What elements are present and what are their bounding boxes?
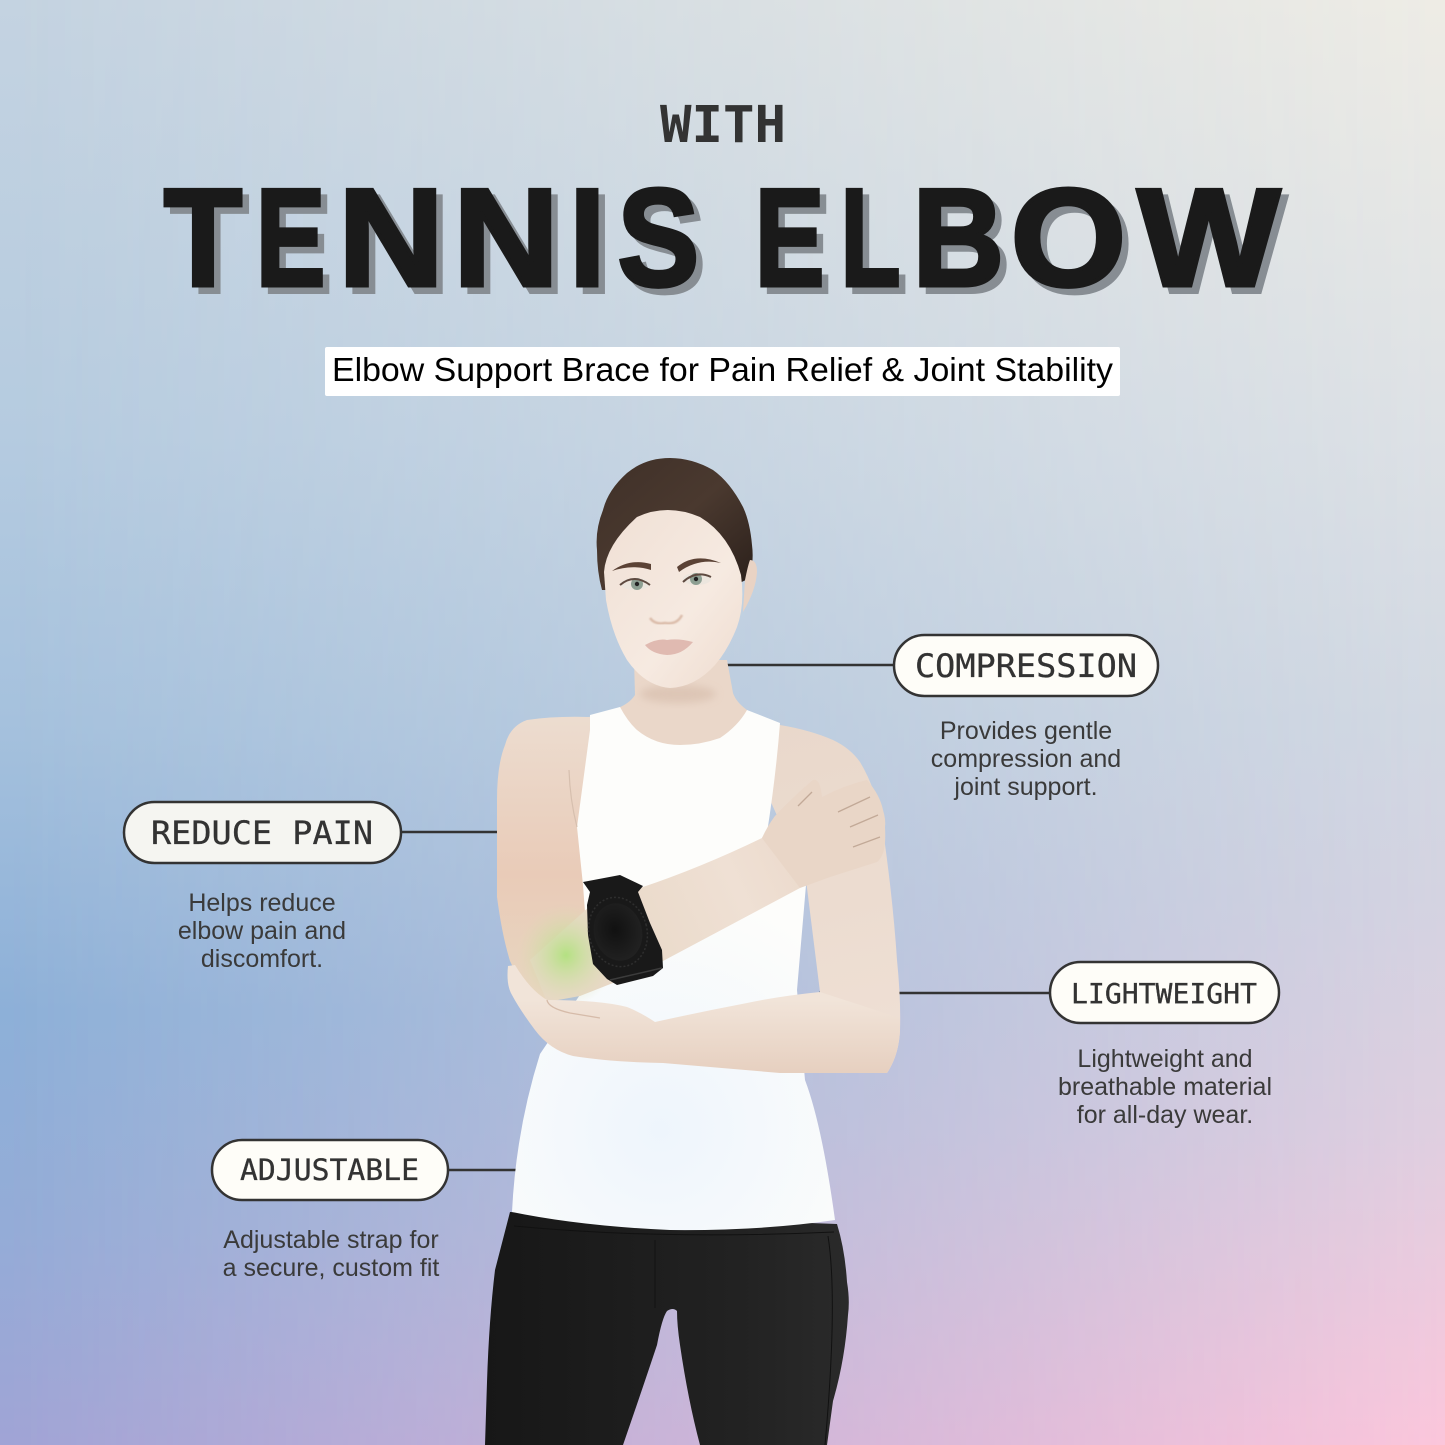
callout: compression: joint support. (953, 773, 1098, 801)
near upper arm and shoulder (497, 716, 620, 1002)
title: TENNIS ELBOW: W (1138, 160, 1281, 316)
callout: compression: COMPRESSION (915, 647, 1137, 685)
lips (645, 639, 693, 655)
kicker: WITH: WITH (660, 96, 786, 155)
title: TENNIS ELBOW: E (761, 167, 831, 322)
callout: reduce pain (124, 802, 401, 973)
title: TENNIS ELBOW: I (576, 167, 612, 322)
callout: reduce pain: elbow pain and (178, 917, 346, 945)
title: TENNIS ELBOW: T (170, 167, 249, 322)
title: TENNIS ELBOW: B (919, 167, 1011, 322)
title: TENNIS ELBOW: W (1144, 167, 1287, 322)
title: TENNIS ELBOW: N (345, 167, 450, 322)
figure: woman wearing elbow brace (485, 458, 900, 1445)
title: TENNIS ELBOW: O (1011, 160, 1126, 316)
connector: adjustable (448, 1169, 518, 1171)
title: TENNIS ELBOW: L (841, 160, 900, 316)
callout: adjustable: a secure, custom fit (223, 1254, 439, 1282)
ear (743, 560, 757, 612)
eyebrows (612, 558, 721, 572)
callout: reduce pain: Helps reduce (188, 889, 336, 917)
callout: reduce pain: REDUCE PAIN (151, 814, 373, 852)
lower forearm and hand under elbow (508, 965, 900, 1073)
callout: adjustable: ADJUSTABLE (240, 1153, 419, 1187)
title: TENNIS ELBOW (164, 160, 1287, 322)
hair (597, 458, 753, 590)
far arm and shoulder (770, 723, 900, 1073)
forearm raised to shoulder (530, 816, 800, 1002)
nose (650, 615, 682, 623)
title: TENNIS ELBOW: N (453, 160, 559, 316)
title: TENNIS ELBOW: S (624, 167, 706, 322)
callout: lightweight: Lightweight and (1077, 1045, 1253, 1073)
armpit crease (569, 770, 577, 827)
title: TENNIS ELBOW: T (164, 160, 242, 316)
title: TENNIS ELBOW: I (570, 160, 605, 316)
callout: compression (894, 635, 1158, 801)
neck shadow (640, 685, 716, 703)
callout: compression: Provides gentle (940, 717, 1112, 745)
subtitle banner: Elbow Support Brace for Pain Relief & Joint Stability (332, 351, 1114, 388)
callout: reduce pain: discomfort. (201, 945, 323, 973)
title: TENNIS ELBOW: N (460, 167, 566, 322)
title: TENNIS ELBOW: L (847, 167, 907, 322)
leggings (485, 1212, 849, 1445)
connector: reduce pain (400, 831, 498, 833)
callout: lightweight: LIGHTWEIGHT (1071, 977, 1257, 1010)
tank top (512, 707, 835, 1230)
neck (612, 660, 755, 755)
brace (581, 875, 663, 985)
title: TENNIS ELBOW: E (755, 160, 824, 316)
callout: lightweight: breathable material (1058, 1073, 1272, 1101)
title: TENNIS ELBOW: O (1017, 167, 1133, 322)
title: TENNIS ELBOW: S (618, 160, 699, 316)
eyes (620, 573, 711, 590)
connector: lightweight (819, 992, 1050, 994)
title: TENNIS ELBOW: E (262, 167, 332, 322)
title: TENNIS ELBOW: B (913, 160, 1004, 316)
callout: adjustable: Adjustable strap for (223, 1226, 439, 1254)
title: TENNIS ELBOW: N (338, 160, 444, 316)
connector: compression (726, 664, 894, 666)
callout: adjustable (212, 1140, 448, 1282)
elbow pain glow (516, 903, 616, 1007)
callout: compression: compression and (931, 745, 1121, 773)
hand on shoulder (762, 780, 885, 888)
face (604, 510, 742, 688)
callout: lightweight: for all-day wear. (1077, 1101, 1253, 1129)
callout: lightweight (1050, 962, 1279, 1129)
title: TENNIS ELBOW: E (256, 160, 325, 316)
